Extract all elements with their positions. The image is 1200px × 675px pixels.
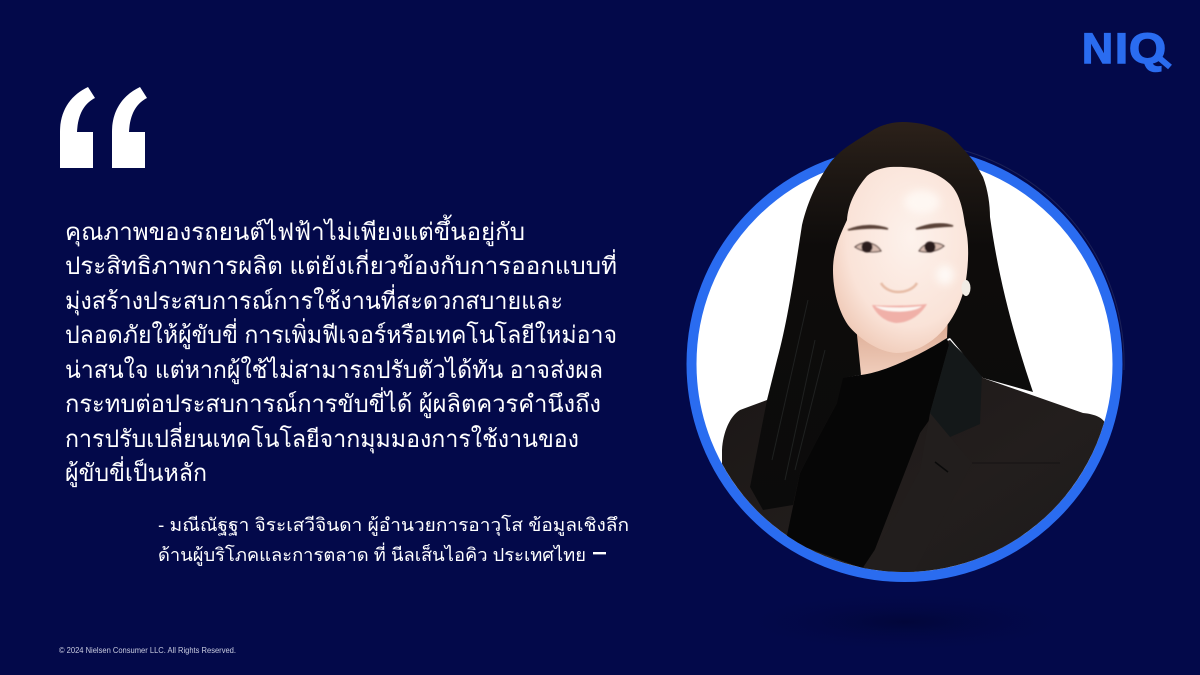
logo: NIQ: Q (1129, 25, 1166, 73)
face (833, 167, 968, 353)
logo: NIQ: I (1115, 25, 1128, 73)
quote text block: ผู้ขับขี่เป็นหลัก (65, 456, 207, 488)
body clipped to circle (722, 339, 1104, 572)
logo: NIQ: N (1082, 25, 1113, 73)
quote text block: มุ่งสร้างประสบการณ์การใช้งานที่สะดวกสบายและ (65, 284, 563, 316)
thin outer arc (950, 147, 1124, 370)
cheek highlight (936, 265, 954, 285)
earring (962, 280, 970, 296)
quote text block: กระทบต่อประสบการณ์การขับขี่ได้ ผู้ผลิตควรคำนึงถึง (65, 387, 601, 419)
quote text block: คุณภาพของรถยนต์ไฟฟ้าไม่เพียงแต่ขึ้นอยู่กับ (65, 214, 525, 247)
blazer (722, 340, 1104, 572)
quote text block: ปลอดภัยให้ผู้ขับขี่ การเพิ่มฟีเจอร์หรือเทคโนโลยีใหม่อาจ (65, 318, 617, 350)
quote text block: น่าสนใจ แต่หากผู้ใช้ไม่สามารถปรับตัวได้ทัน อาจส่งผล (65, 356, 603, 385)
quote text block: การปรับเปลี่ยนเทคโนโลยีจากมุมมองการใช้งานของ (65, 422, 579, 454)
logo: NIQ (1082, 25, 1170, 73)
icon: opening quotation mark (60, 87, 147, 168)
eyes (855, 242, 944, 252)
attribution (158, 514, 629, 566)
eyebrows (848, 224, 953, 230)
long hair, crown and sides, rising above the ring (750, 122, 1033, 510)
portrait photo in circular frame (692, 122, 1124, 600)
shadow beneath portrait (725, 590, 1085, 654)
turtleneck (786, 338, 958, 570)
forehead highlight (904, 190, 940, 214)
attribution: ด้านผู้บริโภคและการตลาด ที่ นีลเส็นไอคิว ประเทศไทย (158, 542, 586, 566)
lapel (860, 341, 982, 580)
footer copyright: © 2024 Nielsen Consumer LLC. All Rights Reserved. (59, 646, 236, 655)
hair strands (772, 300, 825, 480)
ring (692, 151, 1118, 577)
quote text block: ประสิทธิภาพการผลิต แต่ยังเกี่ยวข้องกับการออกแบบที่ (65, 249, 617, 280)
nose (881, 283, 917, 292)
attribution: - มณีณัฐฐา จิระเสวีจินดา ผู้อำนวยการอาวุโส ข้อมูลเชิงลึก (158, 514, 629, 536)
quote text block (65, 214, 617, 488)
mouth (872, 304, 927, 323)
neck (856, 315, 948, 375)
